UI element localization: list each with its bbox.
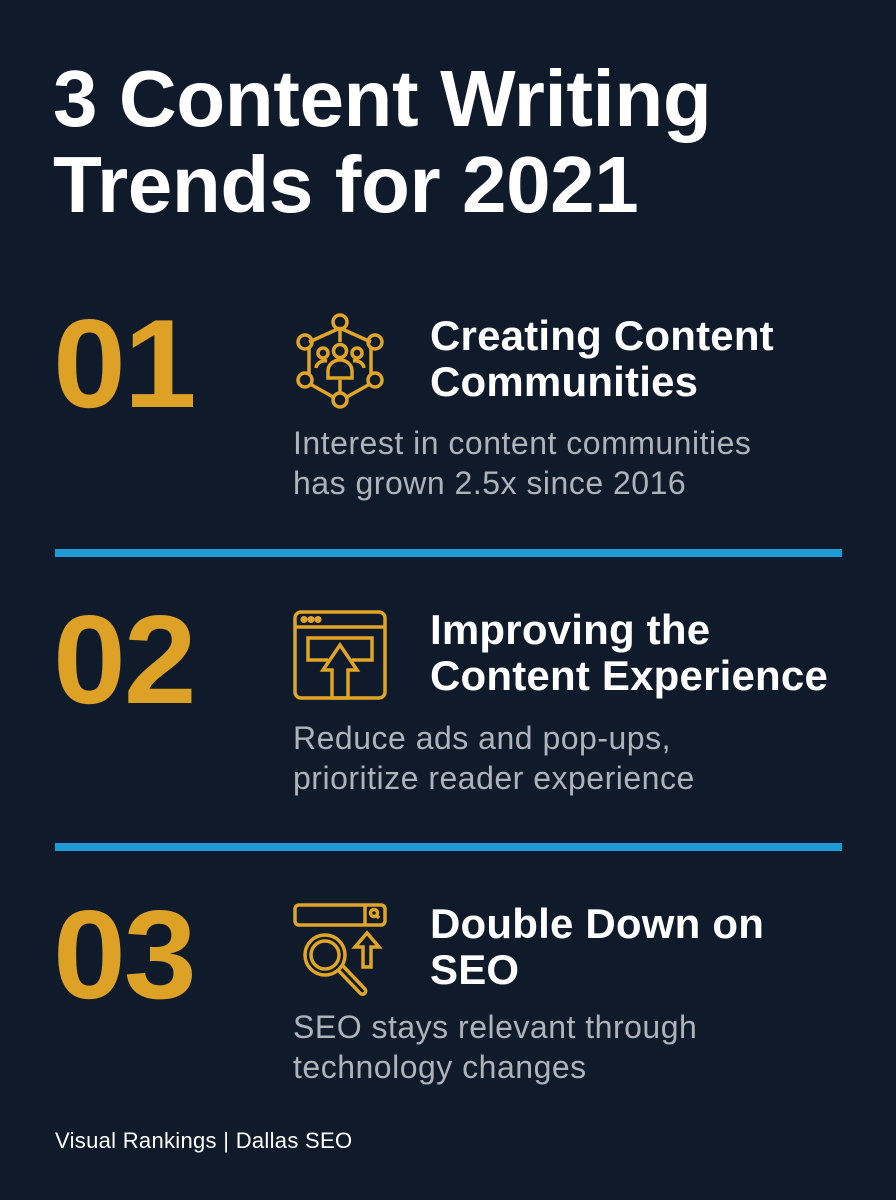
- body 2: [293, 720, 695, 796]
- heading 2: Improving the: [430, 606, 710, 653]
- footer: Visual Rankings | Dallas SEO: [55, 1128, 352, 1153]
- heading 2: [430, 606, 828, 699]
- body 2: Reduce ads and pop-ups,: [293, 720, 671, 756]
- number 03: 03: [53, 884, 195, 1025]
- body 3: SEO stays relevant through: [293, 1009, 697, 1045]
- icon: browser upload: [293, 610, 387, 700]
- heading 1: [430, 312, 774, 405]
- heading 1: Creating Content: [430, 312, 774, 359]
- title: [53, 54, 711, 229]
- body 1: has grown 2.5x since 2016: [293, 465, 686, 501]
- body 3: [293, 1009, 697, 1085]
- body 1: [293, 425, 751, 501]
- icon: search SEO: [293, 903, 387, 996]
- heading 3: SEO: [430, 946, 519, 993]
- heading 3: [430, 900, 764, 993]
- icon: community network: [296, 313, 384, 409]
- title: Trends for 2021: [53, 140, 638, 229]
- number 01: 01: [53, 293, 195, 434]
- title: 3 Content Writing: [53, 54, 711, 143]
- body 1: Interest in content communities: [293, 425, 751, 461]
- heading 3: Double Down on: [430, 900, 764, 947]
- heading 1: Communities: [430, 358, 698, 405]
- heading 2: Content Experience: [430, 652, 828, 699]
- number 02: 02: [53, 589, 195, 730]
- body 3: technology changes: [293, 1049, 587, 1085]
- body 2: prioritize reader experience: [293, 760, 695, 796]
